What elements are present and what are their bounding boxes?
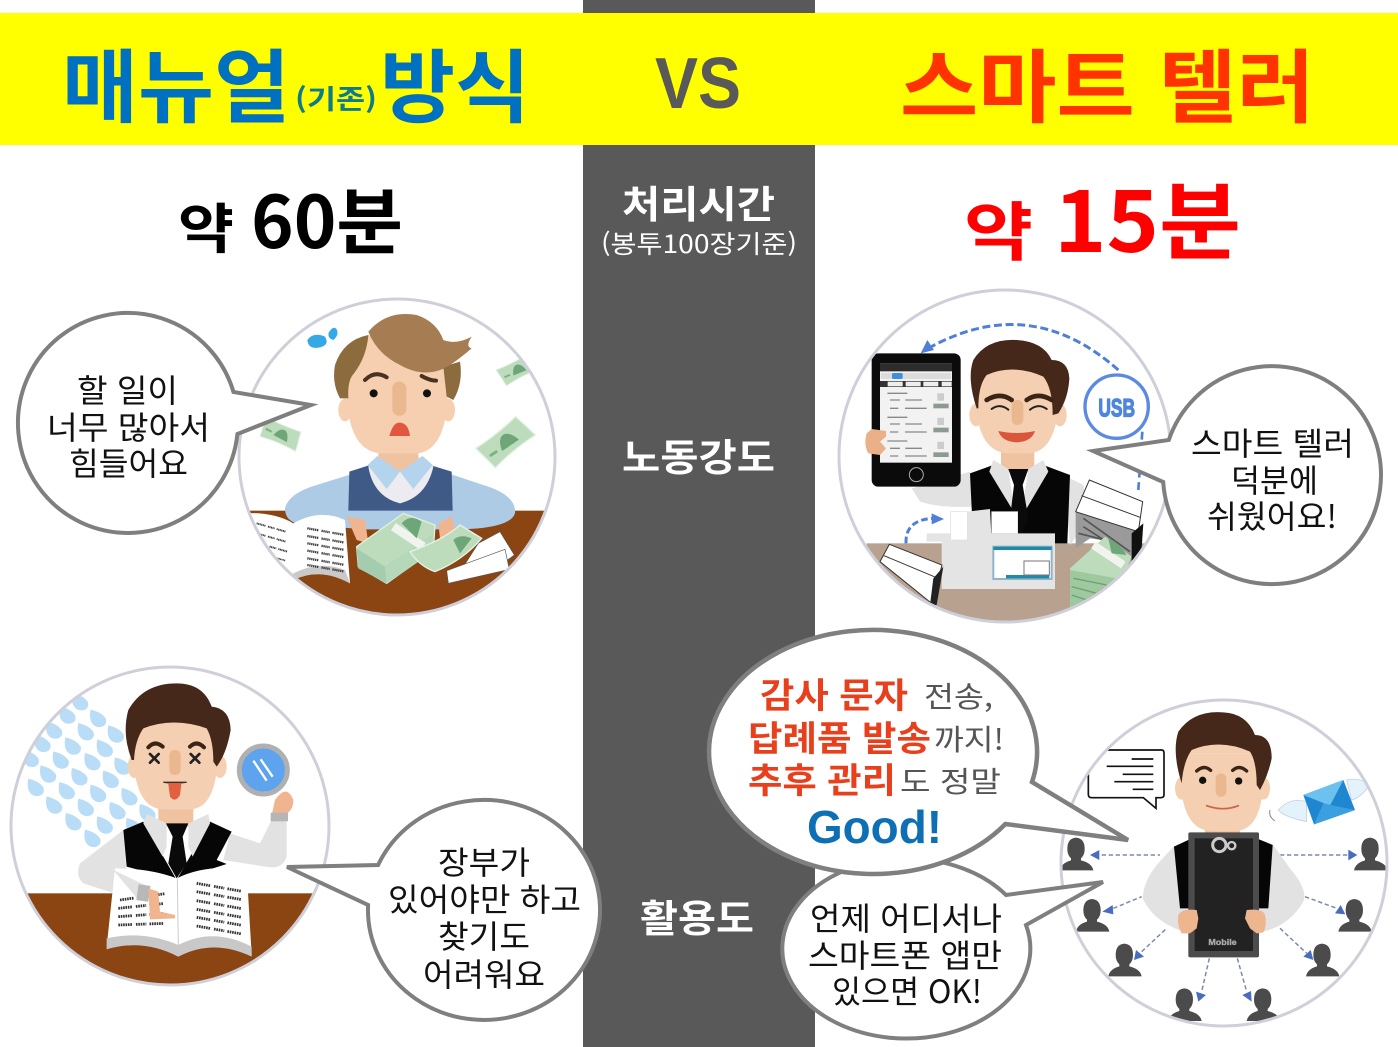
speech bubble: need ledger and hard to find <box>287 800 600 1020</box>
speech bubble: easy thanks to smart teller: 쉬웠어요! <box>1207 492 1337 538</box>
left time: about 60 minutes: 60분 <box>251 164 403 269</box>
speech bubble: easy thanks to smart teller: 덕분에 <box>1231 456 1318 502</box>
speech bubble: need ledger and hard to find: 있어야만 하고 <box>388 875 581 921</box>
center gray column <box>583 0 815 1047</box>
banknote bundle <box>1070 537 1132 610</box>
yellow header band <box>0 13 1398 145</box>
USB badge: USB <box>1098 394 1135 422</box>
speech bubble: need ledger and hard to find: 찾기도 <box>438 912 530 958</box>
speech bubble: anywhere with smartphone app: 스마트폰 앱만 <box>808 931 1002 977</box>
speech bubble: need ledger and hard to find: 어려워요 <box>423 950 545 996</box>
speech bubble: too much work: 할 일이 <box>77 366 178 412</box>
speech bubble: thank-you text, gifts and follow-up: 감사 문자 <box>760 668 908 719</box>
speech bubble: easy thanks to smart teller: 스마트 텔러 <box>1191 419 1354 465</box>
dashed send arrows <box>1090 850 1357 1002</box>
speech bubble: thank-you text, gifts and follow-up: 답례품 발송 <box>748 711 931 762</box>
heading: manual method: 매뉴얼 <box>62 24 290 140</box>
heading: smart teller: 스마트 텔러 <box>900 24 1315 140</box>
heading: manual method <box>62 24 530 140</box>
speech bubble: anywhere with smartphone app: 있으면 OK! <box>832 967 982 1013</box>
mobile device <box>1188 832 1259 957</box>
left time: about 60 minutes <box>178 164 403 269</box>
speech bubble: too much work <box>18 313 311 533</box>
USB badge <box>1085 375 1148 438</box>
center label: processing time: 처리시간 <box>622 174 775 229</box>
speech bubble: thank-you text, gifts and follow-up: 도 정말 <box>900 759 1001 801</box>
speech bubble: anywhere with smartphone app: 언제 어디서나 <box>810 894 1002 940</box>
speech bubble: thank-you text, gifts and follow-up: 전송, <box>924 674 993 716</box>
tablet with app screen <box>872 353 961 487</box>
heading: VS: VS <box>655 44 741 124</box>
bankbook <box>880 544 943 605</box>
illustration: happy teller with tablet and USB <box>839 290 1171 623</box>
hands holding device <box>1178 910 1266 933</box>
mobile device: Mobile <box>1208 937 1237 947</box>
speech bubble: thank-you text, gifts and follow-up: 추후 관리 <box>748 753 896 804</box>
raindrop pattern <box>23 693 156 847</box>
open ledger <box>107 868 252 957</box>
speech bubble: thank-you text, gifts and follow-up: Good! <box>807 801 942 853</box>
illustration: teller with mobile sending to customers <box>1060 700 1387 1026</box>
illustration: overwhelmed clerk with money <box>230 299 570 624</box>
right time: about 15 minutes: 15분 <box>1054 156 1241 277</box>
bankbook stack <box>1076 480 1143 565</box>
center label: processing time: (봉투100장기준) <box>601 225 797 261</box>
deposit machine <box>927 509 1055 589</box>
customer silhouettes <box>1060 838 1387 1021</box>
magnifying glass <box>239 746 287 794</box>
flying envelope icon <box>1270 779 1370 824</box>
right time: about 15 minutes <box>964 156 1241 277</box>
right time: about 15 minutes: 약 <box>964 182 1033 274</box>
heading: manual method: (기존) <box>295 78 377 117</box>
left time: about 60 minutes: 약 <box>178 185 234 264</box>
speech bubble: too much work: 힘들어요 <box>69 439 188 485</box>
speech bubble: thank-you text, gifts and follow-up <box>709 630 1128 874</box>
center label: labor intensity: 노동강도 <box>622 427 775 482</box>
illustration: tired clerk with ledger and magnifier <box>0 667 340 1000</box>
speech bubble: too much work: 너무 많아서 <box>47 403 210 449</box>
chat bubble icon <box>1088 750 1164 808</box>
speech bubble: anywhere with smartphone app <box>782 859 1103 1039</box>
speech bubble: thank-you text, gifts and follow-up: 까지! <box>934 717 1004 759</box>
heading: manual method: 방식 <box>380 24 530 140</box>
center label: usability: 활용도 <box>640 888 754 943</box>
speech bubble: easy thanks to smart teller <box>1093 366 1381 584</box>
speech bubble: need ledger and hard to find: 장부가 <box>438 838 530 884</box>
dashed USB arrow to tablet <box>921 325 1118 370</box>
center label: processing time <box>601 174 797 261</box>
